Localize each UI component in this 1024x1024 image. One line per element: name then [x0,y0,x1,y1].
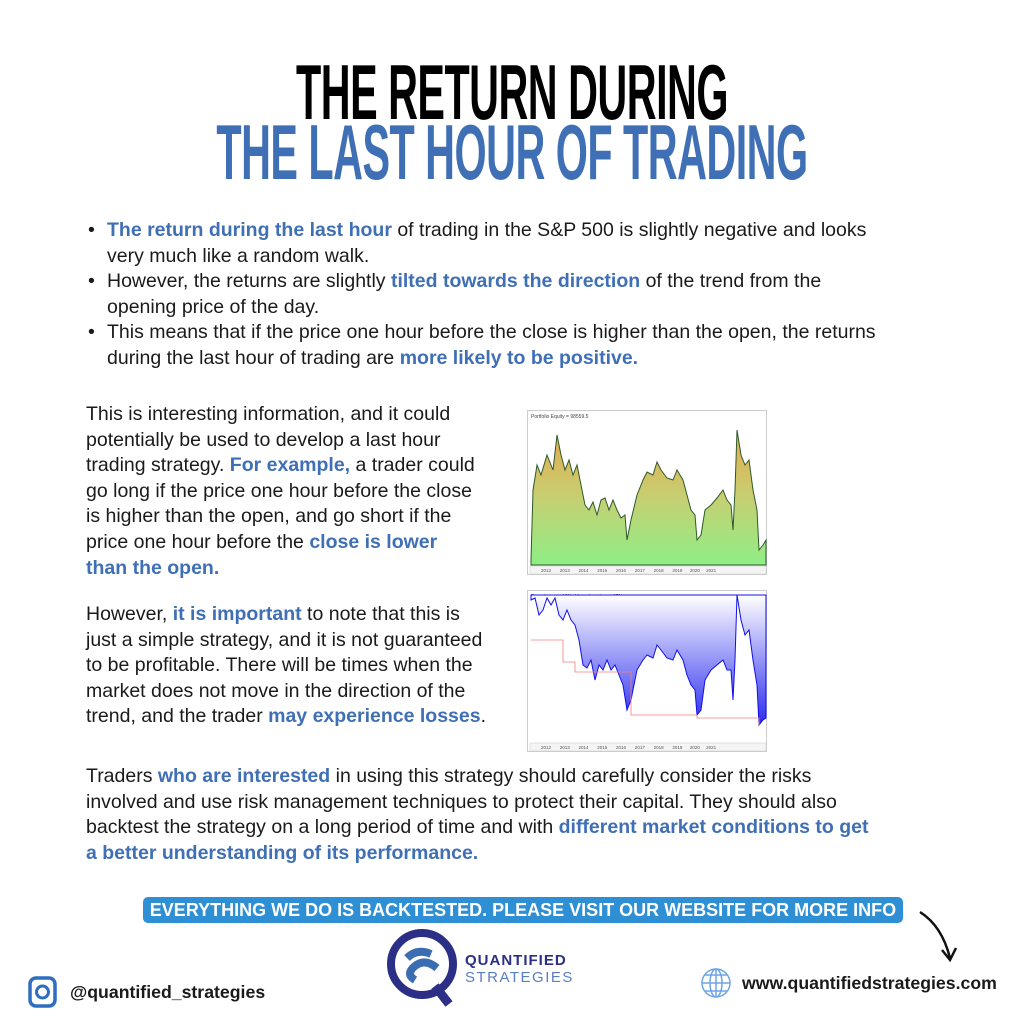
title line 2: THE LAST HOUR OF TRADING [216,108,808,196]
logo: QUANTIFIED [465,952,567,969]
website [701,968,997,998]
chart: equity [527,410,767,575]
arrow [919,911,958,962]
chart: drawdown: Drawdown = -16%, Max. drawdown -17% [531,594,623,600]
bullet list: This means that if the price one hour before the close is higher than the open, the returns during the last hour of trading are more likely to be positive. [107,321,876,369]
paragraph: example: This is interesting information, and it could potentially be used to develop a last hour trading strategy. For example, a trader could go long if the price one hour before the close is higher than the open, and go short if the price one hour before the close is lower than the open. [86,403,475,579]
bullet list: However, the returns are slightly tilted towards the direction of the trend from the opening price of the day. [107,270,821,318]
logo: STRATEGIES [465,969,574,986]
bullet list: The return during the last hour of trading in the S&P 500 is slightly negative and looks very much like a random walk. [107,219,866,267]
instagram handle: @quantified_strategies [70,982,265,1002]
chart: drawdown [527,590,767,752]
logo [387,929,574,1007]
chart: drawdown: 2012 2013 2014 2015 2016 2017 2018 2019 2020 2021 [541,745,717,750]
paragraph: caution: However, it is important to note that this is just a simple strategy, and it is not guaranteed to be profitable. There will be times when the market does not move in the direction of the trend, and the trader may experience losses. [86,603,486,727]
banner: EVERYTHING WE DO IS BACKTESTED. PLEASE VISIT OUR WEBSITE FOR MORE INFO [150,900,896,920]
instagram handle [28,976,265,1008]
website: www.quantifiedstrategies.com [742,972,997,992]
chart: equity: 2012 2013 2014 2015 2016 2017 2018 2019 2020 2021 [541,568,717,573]
bullet list [88,219,876,369]
chart: equity: Portfolio Equity = 98559.5 [531,414,589,420]
paragraph: traders: Traders who are interested in using this strategy should carefully consider the risks involved and use risk management techniques to protect their capital. They should also backtest the strategy on a long period of time and with different market conditions to get a better understanding of its performance. [86,765,868,864]
title line 1: THE RETURN DURING [296,48,728,136]
